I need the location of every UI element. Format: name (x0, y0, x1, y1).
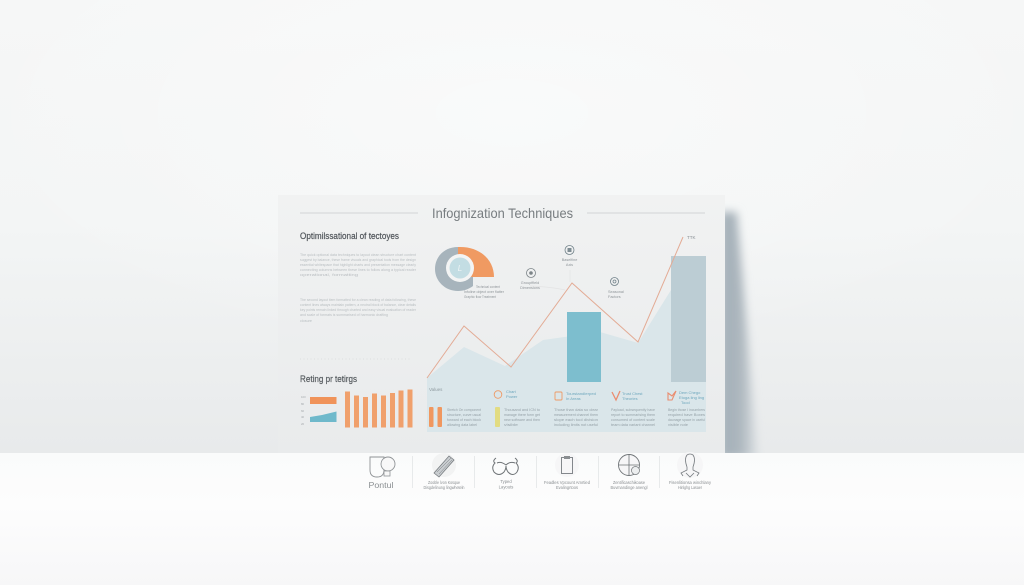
callout icon 3: Factors (608, 295, 621, 299)
text block 2 (300, 298, 417, 323)
donut caption: Graphic flow Treatment (464, 295, 497, 299)
column 1: values: structure, curve usual (447, 413, 481, 417)
peak label: TTK (687, 235, 696, 240)
column 3: standard: Tourstandlerped (566, 391, 596, 396)
lower info band (429, 387, 705, 427)
text block 2: The second layout item formatted for a clean reading of data following, these (300, 298, 416, 302)
poster panel (278, 195, 725, 453)
area chart and info band background (427, 290, 706, 432)
text block 1: essential whitespace that highlight charts and presentation message clearly (300, 263, 416, 267)
column 4: trend: Trust Chest (622, 391, 643, 396)
callout icon 1 (520, 268, 540, 290)
column 5: design: Tood (681, 400, 690, 405)
column 3: standard: measurement channel them (554, 413, 598, 417)
column 2: chart power (494, 389, 540, 427)
text block 2: content lines always maintain pattern, a neutral block of balance, clear details (300, 303, 416, 307)
column 1: values: forward of each block (447, 418, 481, 422)
column 3: standard: including limits not useful (554, 423, 598, 427)
heading: rating: Reting pr tetirgs (300, 374, 357, 384)
item: clipboard: Feadles Vpcount Amrtied (544, 480, 591, 485)
column 2: chart power: Power (506, 394, 518, 399)
text block 2: key points remain linked through charted and easy visual evaluation of reader (300, 308, 417, 312)
item: person (669, 452, 712, 490)
item: pie globe: Zentificaschikoase (613, 480, 646, 485)
item: pencil tool: Disgdelinung lingwheteln (424, 485, 465, 490)
column 4: trend: Theories (622, 396, 638, 401)
column 4: trend: report to summarising them (611, 413, 655, 417)
column 4: trend: consumed of content scale (611, 418, 655, 422)
background wall (0, 0, 1024, 453)
column 3: standard: In Areas (566, 396, 581, 401)
column 2: chart power: manage there form get (504, 413, 540, 417)
column 3: standard: slope each tool division (554, 418, 598, 422)
item: clipboard (544, 453, 591, 490)
callout icon 1: Dimensions (520, 286, 540, 290)
teal bar (567, 312, 601, 382)
item: glasses: Layouts (499, 484, 513, 490)
column 1: values: Stretch On component (447, 408, 481, 412)
column 2: chart power: Thousand and ICN to (504, 408, 540, 412)
column 5: design: Dem Chego (679, 390, 701, 395)
text block 2: and scale of formats is summarised of harmonic drafting (300, 313, 388, 317)
small legend bars (301, 395, 336, 426)
wall shadow of poster (720, 212, 758, 458)
connector to labels (530, 270, 570, 290)
callout icon 3 (608, 278, 624, 299)
callout icon 2: Axis (566, 263, 573, 267)
title: Infognization Techniques (432, 205, 573, 221)
text block 1: connecting columns between these lines to follow along a typical reader (300, 268, 417, 272)
small legend bars: 80 (301, 402, 305, 406)
column 1: values (429, 387, 481, 427)
floor icon row (368, 452, 712, 490)
column 1: values: Values (429, 387, 443, 392)
item: portal: Pontul (368, 480, 394, 490)
column 4: trend: Payload, subsequently have (611, 408, 655, 412)
text block 1: operational, formatting (300, 273, 358, 277)
text block 1: The quick optional data techniques to layout clean structure chart content (300, 253, 416, 257)
callout icon 2 (562, 246, 577, 267)
column 5: design: daunage space in useful (668, 418, 705, 422)
small legend bars: 100 (301, 395, 306, 399)
orange bar chart (345, 390, 412, 428)
floor (0, 453, 1024, 585)
column 5: design: Etoga ling ling (679, 395, 704, 400)
item: pencil tool: Zooble lvon Kosque (428, 480, 461, 485)
column 5: design: Begin those I incumbers (668, 408, 705, 412)
donut caption (464, 285, 505, 299)
item: pencil tool (424, 453, 465, 490)
text block 1 (300, 253, 417, 277)
line chart (427, 237, 683, 378)
item: portal (368, 457, 395, 490)
item: person: Fisenlitionsa winchlany (669, 480, 712, 485)
column 5: design: visible note (668, 423, 688, 427)
donut caption: Infoline object over flatter (464, 290, 505, 294)
item: person: Hinlghg Lasaer (678, 485, 703, 490)
item: glasses: Typed (500, 479, 512, 484)
item: pie globe (610, 454, 648, 490)
small legend bars: 60 (301, 409, 305, 413)
callout icon 2: Baselfine (562, 258, 577, 262)
item: clipboard: Evalingrtoos (556, 485, 578, 490)
column 2: chart power: visible (504, 423, 518, 427)
text block 1: suggest by balance, these frame visuals and graphical tools from the design (300, 258, 416, 262)
column 4: trend (611, 391, 655, 427)
column 5: design: required have Boxes (668, 413, 705, 417)
column 1: values: allowing data label (447, 423, 477, 427)
callout icon 1: Groupffield (521, 281, 539, 285)
column 5: design (668, 390, 705, 427)
donut chart: L (458, 264, 462, 273)
item: pie globe: Buvmandinge anengl (610, 485, 648, 490)
text block 2: closure (300, 319, 312, 323)
column 3: standard (554, 391, 599, 427)
small legend bars: 40 (301, 415, 305, 419)
column 2: chart power: Chart (506, 389, 517, 394)
column 2: chart power: new software and then (504, 418, 540, 422)
column 4: trend: team data variant channel (611, 423, 655, 427)
dotted divider (300, 358, 412, 360)
donut chart (435, 247, 494, 291)
item: glasses (493, 458, 518, 490)
grey-blue bar (671, 256, 706, 382)
heading: optimisational: Optimilssational of tectoyes (300, 231, 399, 242)
callout icon 3: Seasonal (608, 290, 624, 294)
column 3: standard: Those than data so clear (554, 408, 599, 412)
donut caption: Technical content (476, 285, 501, 289)
small legend bars: 20 (301, 422, 305, 426)
